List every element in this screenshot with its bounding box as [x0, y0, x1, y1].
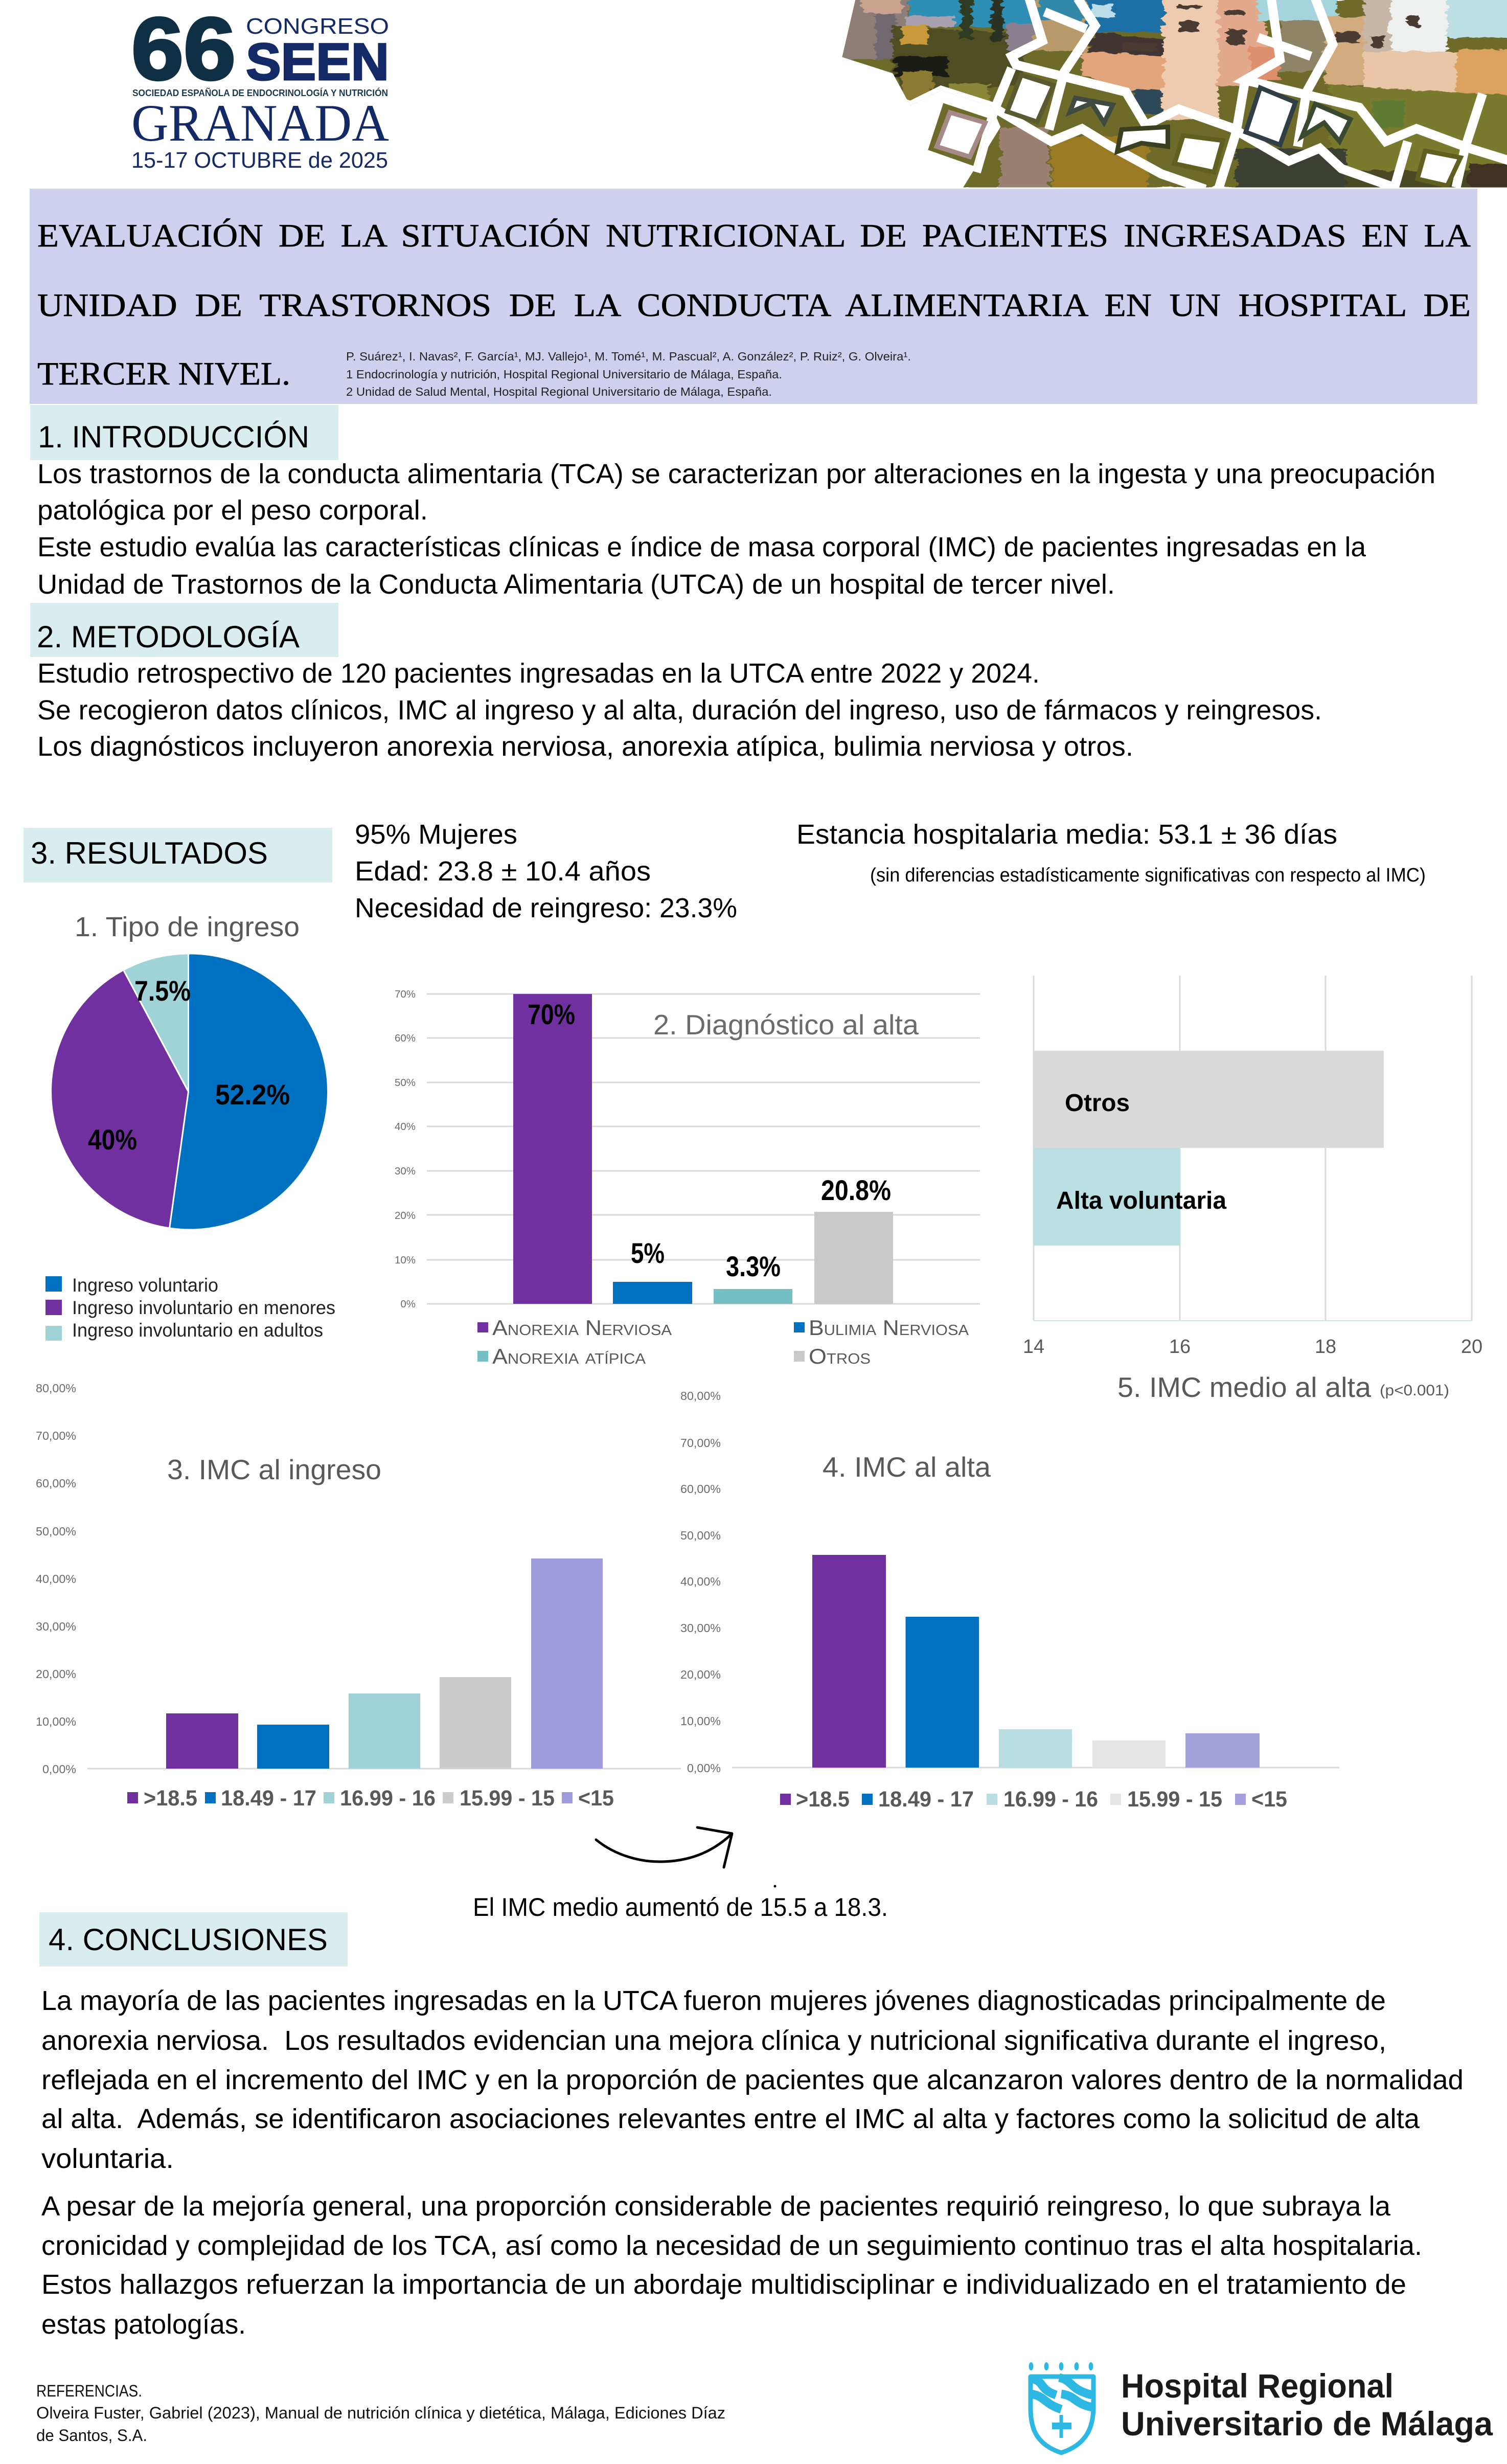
- pie legend: [45, 1275, 335, 1341]
- axis labels: 18: [1315, 1336, 1336, 1358]
- pie slices: [51, 954, 328, 1230]
- key figures: sex, age, readmission: [355, 819, 737, 923]
- key figure: hospital stay: Estancia hospitalaria media: 53.1 ± 36 días: [796, 819, 1337, 850]
- logo text: Universitario de Málaga: [1121, 2405, 1493, 2443]
- title text: EVALUACIÓN DE LA SITUACIÓN NUTRICIONAL DE PACIENTES INGRESADAS EN LA: [37, 217, 1471, 254]
- text block: metodología: Se recogieron datos clínicos, IMC al ingreso y al alta, duración del ingreso, uso de fármacos y reingresos.: [37, 695, 1322, 726]
- axis labels: [36, 1382, 76, 1776]
- authors and affiliations: 1 Endocrinología y nutrición, Hospital Regional Universitario de Málaga, España.: [346, 368, 782, 381]
- text block: conclusiones: al alta. Además, se identificaron asociaciones relevantes entre el IMC al alta y factores como la solicitud de alta: [41, 2104, 1420, 2134]
- axis labels: 50,00%: [680, 1529, 721, 1542]
- axis labels: [1023, 1336, 1482, 1358]
- references: REFERENCIAS.: [36, 2382, 142, 2400]
- legend: Bulimia Nerviosa: [809, 1316, 969, 1340]
- text block: metodología: Estudio retrospectivo de 120 pacientes ingresadas en la UTCA entre 2022 y 2024.: [37, 658, 1040, 689]
- heading: conclusiones: 4. CONCLUSIONES: [49, 1923, 328, 1957]
- arrow: from admission BMI to discharge BMI: [596, 1827, 732, 1867]
- pie labels: 52.2%: [215, 1078, 290, 1111]
- axis labels: 14: [1023, 1336, 1044, 1358]
- pie labels: 40%: [88, 1123, 137, 1156]
- title text: UNIDAD DE TRASTORNOS DE LA CONDUCTA ALIMENTARIA EN UN HOSPITAL DE: [37, 287, 1471, 323]
- legend: 15.99 - 15: [460, 1786, 555, 1811]
- text block: conclusiones: voluntaria.: [41, 2143, 174, 2174]
- heading: resultados: [24, 828, 332, 883]
- text block: introducción: [37, 459, 1435, 600]
- gridlines and axis labels: 0%: [400, 1298, 416, 1310]
- chart title: 1. Tipo de ingreso: [75, 912, 300, 942]
- axis labels: 50,00%: [36, 1525, 76, 1538]
- chart title: 4. IMC al alta: [823, 1451, 991, 1483]
- icon: shield: [1029, 2362, 1093, 2453]
- bar: otros: [1034, 1051, 1384, 1148]
- axis labels: 20: [1461, 1336, 1482, 1358]
- legend: >18.5: [144, 1786, 197, 1811]
- legend: Anorexia Nerviosa: [492, 1316, 672, 1340]
- legend: 16.99 - 16: [340, 1786, 436, 1811]
- title text: [37, 217, 1471, 392]
- axis labels: 60,00%: [680, 1482, 721, 1496]
- axis labels: 10,00%: [680, 1714, 721, 1728]
- axis labels: 40,00%: [36, 1572, 76, 1586]
- bar value labels: 5%: [631, 1237, 665, 1269]
- authors and affiliations: P. Suárez¹, I. Navas², F. García¹, MJ. Vallejo¹, M. Tomé¹, M. Pascual², A. González², P. Ruiz², G. Olveira¹.: [346, 350, 911, 363]
- authors and affiliations: 2 Unidad de Salud Mental, Hospital Regional Universitario de Málaga, España.: [346, 385, 772, 398]
- text block: conclusiones: La mayoría de las pacientes ingresadas en la UTCA fueron mujeres jóvenes diagnosticadas principalmente de: [41, 1985, 1386, 2016]
- legend: <15: [578, 1786, 614, 1811]
- heading: conclusiones: [39, 1912, 348, 1966]
- text block: conclusiones: estas patologías.: [41, 2309, 246, 2340]
- pie legend: Ingreso voluntario: [72, 1275, 218, 1296]
- logo: 66 Congreso SEEN Granada: GRANADA: [131, 94, 389, 152]
- chart title: 3. IMC al ingreso: [167, 1454, 381, 1485]
- axis labels: 0,00%: [42, 1762, 76, 1776]
- gridlines and axis labels: 20%: [395, 1210, 416, 1222]
- legend: [780, 1787, 1287, 1812]
- axis labels: 20,00%: [680, 1668, 721, 1681]
- text block: introducción: patológica por el peso corporal.: [37, 495, 428, 526]
- legend: 15.99 - 15: [1127, 1787, 1222, 1812]
- callout: IMC medio: El IMC medio aumentó de 15.5 a 18.3.: [473, 1893, 888, 1922]
- key figure: hospital stay: (sin diferencias estadísticamente significativas con respecto al IMC): [870, 865, 1426, 886]
- text block: introducción: Los trastornos de la conducta alimentaria (TCA) se caracterizan por alteraciones en la ingesta y una preocupación: [37, 459, 1435, 489]
- logo: 66 Congreso SEEN Granada: SEEN: [246, 33, 389, 91]
- logo: 66 Congreso SEEN Granada: CONGRESO: [246, 14, 389, 39]
- text block: introducción: Unidad de Trastornos de la Conducta Alimentaria (UTCA) de un hospital de tercer nivel.: [37, 569, 1115, 600]
- text block: conclusiones: anorexia nerviosa. Los resultados evidencian una mejora clínica y nutricional significativa durante el ingreso,: [41, 2025, 1386, 2056]
- heading: introducción: 1. INTRODUCCIÓN: [38, 420, 309, 454]
- logo text: [1121, 2367, 1493, 2443]
- gridlines and axis labels: 60%: [395, 1032, 416, 1044]
- gridlines and axis labels: 10%: [395, 1254, 416, 1266]
- legend: Anorexia atípica: [492, 1344, 646, 1368]
- text block: conclusiones: reflejada en el incremento del IMC y en la proporción de pacientes que alcanzaron valores dentro de la normalidad: [41, 2065, 1464, 2095]
- key figures: sex, age, readmission: 95% Mujeres: [355, 819, 517, 850]
- bar: otros: Otros: [1065, 1090, 1130, 1117]
- chart 3: bar, IMC al ingreso: [36, 1382, 681, 1811]
- text block: metodología: [37, 658, 1322, 762]
- axis labels: 80,00%: [36, 1382, 76, 1395]
- axis labels: [680, 1389, 721, 1775]
- axis labels: 80,00%: [680, 1389, 721, 1403]
- logo: 66 Congreso SEEN Granada: [131, 0, 389, 173]
- bars: [812, 1555, 1260, 1768]
- axis labels: 16: [1169, 1336, 1191, 1358]
- pie legend: Ingreso involuntario en adultos: [72, 1320, 323, 1341]
- logo text: Hospital Regional: [1121, 2367, 1394, 2405]
- legend: 18.49 - 17: [878, 1787, 974, 1812]
- section: introducción: [30, 405, 1435, 600]
- bar value labels: [528, 998, 891, 1282]
- axis labels: 30,00%: [36, 1620, 76, 1633]
- text block: conclusiones: [41, 1985, 1464, 2340]
- gridlines and axis labels: [395, 988, 980, 1310]
- references: [36, 2382, 725, 2445]
- logo: 66 Congreso SEEN Granada: SOCIEDAD ESPAÑOLA DE ENDOCRINOLOGÍA Y NUTRICIÓN: [132, 87, 388, 98]
- text block: introducción: Este estudio evalúa las características clínicas e índice de masa corporal (IMC) de pacientes ingresadas en la: [37, 532, 1366, 562]
- axis labels: 20,00%: [36, 1667, 76, 1681]
- legend: Otros: [809, 1344, 871, 1368]
- section: conclusiones: [39, 1912, 1464, 2340]
- axis labels: 0,00%: [687, 1761, 721, 1775]
- pie labels: [88, 975, 290, 1156]
- authors and affiliations: [346, 350, 911, 398]
- legend: 18.49 - 17: [221, 1786, 316, 1811]
- axis labels: 10,00%: [36, 1715, 76, 1728]
- title text: TERCER NIVEL.: [37, 355, 290, 392]
- gridlines and axis labels: 30%: [395, 1165, 416, 1177]
- axis labels: 40,00%: [680, 1575, 721, 1588]
- illustration: Alhambra painting with white geometric lattice: [818, 0, 1507, 189]
- legend: [477, 1316, 969, 1368]
- logo: 66 Congreso SEEN Granada: 15-17 OCTUBRE de 2025: [131, 148, 388, 173]
- gridlines and axis labels: 50%: [395, 1077, 416, 1089]
- text block: conclusiones: Estos hallazgos refuerzan la importancia de un abordaje multidisciplinar e individualizado en el tratamiento de: [41, 2269, 1406, 2300]
- text block: metodología: Los diagnósticos incluyeron anorexia nerviosa, anorexia atípica, bulimia nerviosa y otros.: [37, 731, 1133, 762]
- logo: Hospital Regional Universitario de Málaga: [1029, 2362, 1493, 2453]
- axis labels: 70,00%: [680, 1436, 721, 1450]
- bar value labels: 20.8%: [821, 1174, 891, 1206]
- chart 5: horizontal bars, IMC medio al alta: [1023, 976, 1482, 1403]
- key figure: hospital stay: [796, 819, 1426, 886]
- bar value labels: 3.3%: [726, 1250, 781, 1282]
- pie legend: Ingreso involuntario en menores: [72, 1297, 335, 1318]
- text block: conclusiones: cronicidad y complejidad de los TCA, así como la necesidad de un seguimiento continuo tras el alta hospitalaria.: [41, 2230, 1422, 2261]
- legend: >18.5: [796, 1787, 850, 1812]
- logo: 66 Congreso SEEN Granada: 66: [131, 0, 236, 98]
- gridlines and axis labels: 70%: [395, 988, 416, 1000]
- bars: [513, 994, 893, 1304]
- heading: metodología: [30, 603, 338, 657]
- axis labels: 60,00%: [36, 1477, 76, 1490]
- chart title: (p<0.001): [1380, 1382, 1449, 1399]
- chart 4: bar, IMC al alta: [680, 1389, 1339, 1812]
- axis labels: 70,00%: [36, 1429, 76, 1442]
- text block: conclusiones: A pesar de la mejoría general, una proporción considerable de pacientes requirió reingreso, lo que subraya la: [41, 2191, 1391, 2222]
- bars: [166, 1558, 603, 1769]
- key figures: sex, age, readmission: Necesidad de reingreso: 23.3%: [355, 893, 737, 923]
- heading: resultados: 3. RESULTADOS: [31, 836, 268, 870]
- chart 2: bar, diagnóstico al alta: [395, 988, 980, 1368]
- title panel: [30, 189, 1477, 404]
- bar: alta voluntaria: [1034, 1148, 1226, 1246]
- legend: [127, 1786, 614, 1811]
- key figures: sex, age, readmission: Edad: 23.8 ± 10.4 años: [355, 856, 651, 887]
- axis labels: 30,00%: [680, 1621, 721, 1635]
- chart 1: pie, tipo de ingreso: [45, 912, 335, 1341]
- heading: metodología: 2. METODOLOGÍA: [37, 620, 300, 654]
- pie labels: 7.5%: [134, 975, 191, 1007]
- gridlines and axis labels: 40%: [395, 1121, 416, 1133]
- bar value labels: 70%: [528, 998, 575, 1030]
- chart title: 5. IMC medio al alta: [1117, 1371, 1371, 1403]
- references: de Santos, S.A.: [36, 2426, 147, 2445]
- references: Olveira Fuster, Gabriel (2023), Manual de nutrición clínica y dietética, Málaga, Ediciones Díaz: [36, 2404, 725, 2422]
- bar: alta voluntaria: Alta voluntaria: [1056, 1187, 1226, 1214]
- legend: <15: [1251, 1787, 1287, 1812]
- legend: 16.99 - 16: [1003, 1787, 1098, 1812]
- section: metodología: [30, 603, 1322, 762]
- heading: introducción: [30, 405, 338, 460]
- chart title: 2. Diagnóstico al alta: [653, 1009, 919, 1041]
